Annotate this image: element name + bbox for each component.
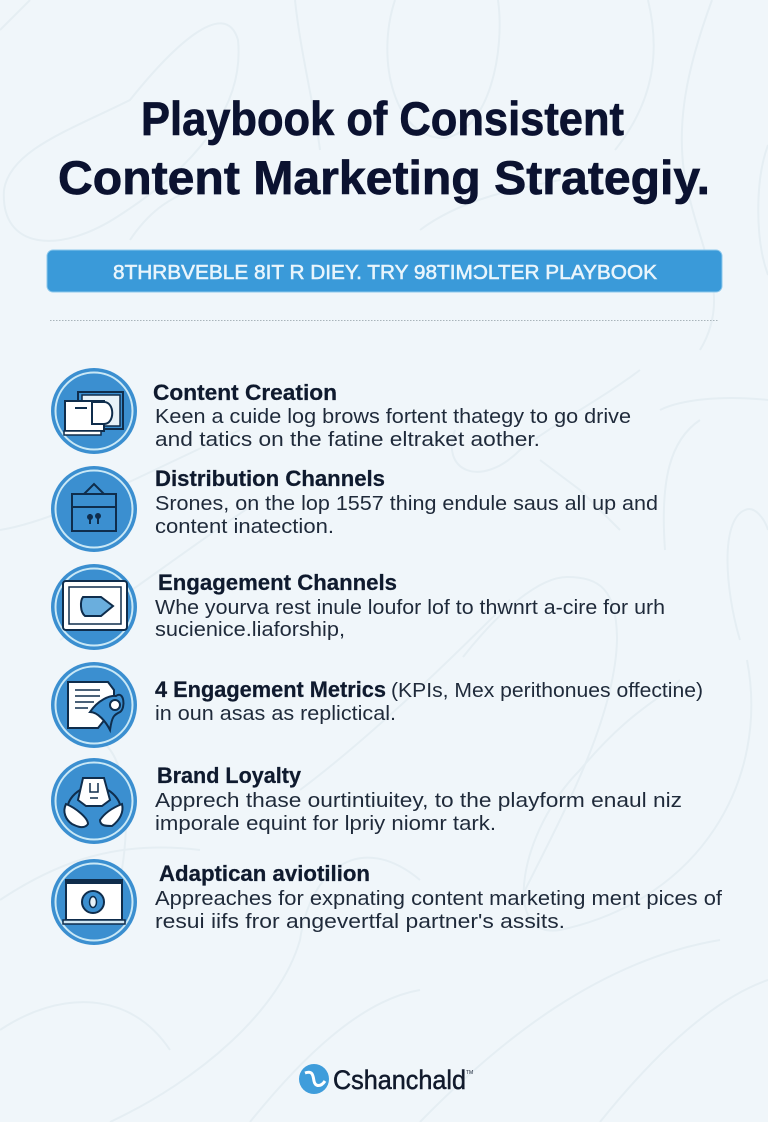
description: Whe yourva rest inule loufor lof to thwnrt a-cire for urh <box>155 596 665 619</box>
item 3: engagement channels <box>51 564 665 650</box>
heading with inline note <box>155 677 703 702</box>
description: resui iifs fror angevertfal partner's assits. <box>155 910 565 933</box>
description: imporale equint for lpriy niomr tark. <box>155 812 496 835</box>
item 5: brand loyalty <box>51 758 682 844</box>
icon: screen with shape <box>51 564 137 650</box>
description: Apprech thase ourtintiuitey, to the playform enaul niz <box>155 789 682 812</box>
description: and tatics on the fatine eltraket aother. <box>155 428 540 451</box>
description <box>155 596 665 641</box>
wordmark: Cshanchald <box>333 1065 466 1095</box>
icon: embracing hands <box>51 758 137 844</box>
item 4: engagement metrics <box>51 662 703 748</box>
heading with inline note: (KPIs, Mex perithonues offectine) <box>391 679 703 702</box>
description <box>155 887 722 933</box>
description: Keen a cuide log brows fortent thategy to go drive <box>155 405 631 428</box>
item 6: adaptican aviotilion <box>51 859 722 945</box>
icon: document with tag <box>51 662 137 748</box>
heading: Adaptican aviotilion <box>159 861 370 886</box>
description: sucienice.liaforship, <box>155 618 345 641</box>
banner: 8THRBVEBLE 8IT R DIEY. TRY 98TIMƆLTER PLAYBOOK <box>113 262 658 284</box>
logo <box>299 1064 473 1095</box>
icon: laptop <box>51 859 137 945</box>
logo: TM <box>466 1070 473 1076</box>
description: content inatection. <box>155 515 334 538</box>
description: in oun asas as replictical. <box>155 702 396 725</box>
item 2: distribution channels <box>51 466 658 552</box>
heading: Content Creation <box>153 380 337 405</box>
title: Content Marketing Strategiy. <box>58 151 710 204</box>
title <box>58 92 710 204</box>
description: Appreaches for expnating content marketing ment pices of <box>155 887 722 910</box>
heading: Brand Loyalty <box>157 763 302 788</box>
icon: briefcase box <box>51 466 137 552</box>
heading with inline note: 4 Engagement Metrics <box>155 677 386 702</box>
icon: logo mark <box>299 1064 329 1094</box>
description <box>155 405 631 451</box>
heading: Distribution Channels <box>155 466 385 491</box>
banner <box>47 250 722 292</box>
title: Playbook of Consistent <box>141 92 624 145</box>
icon: documents <box>51 368 137 454</box>
description: Srones, on the lop 1557 thing endule saus all up and <box>155 492 658 515</box>
heading: Engagement Channels <box>158 570 397 595</box>
description <box>155 789 682 835</box>
item 1: content creation <box>51 368 631 454</box>
description <box>155 492 658 538</box>
